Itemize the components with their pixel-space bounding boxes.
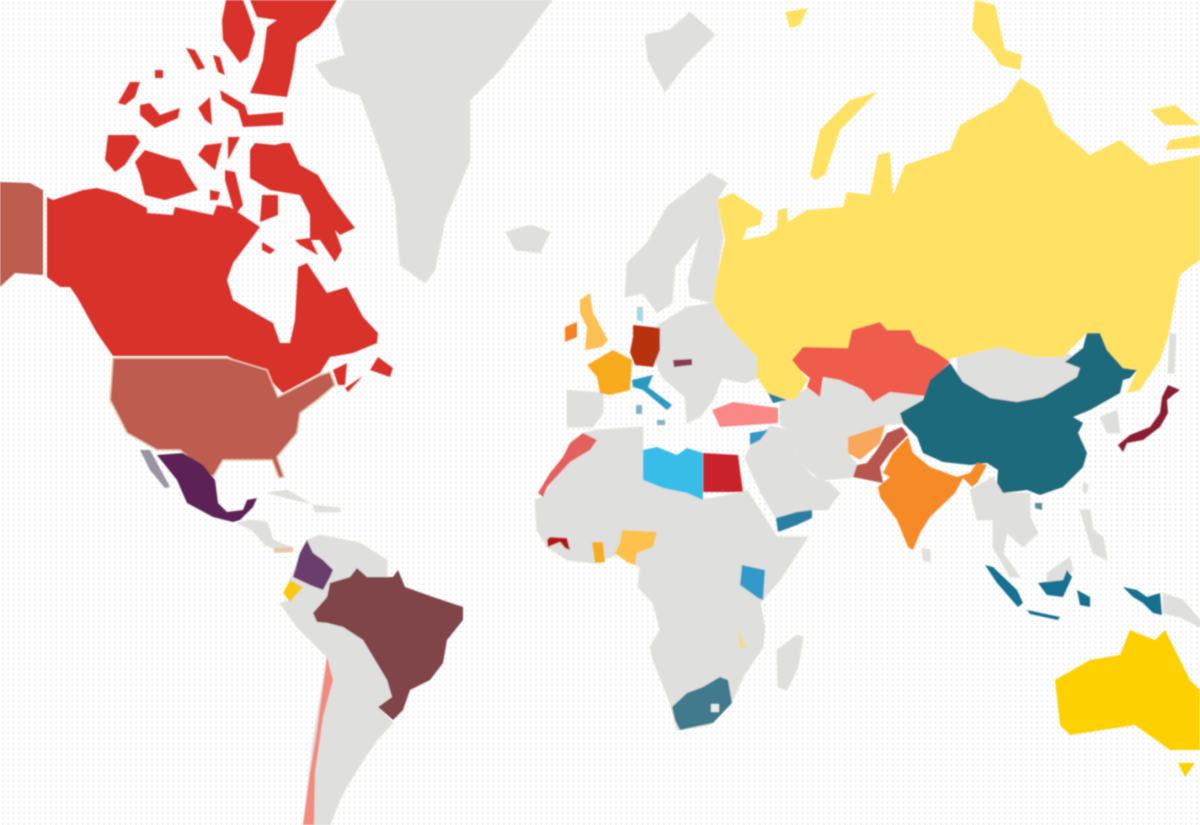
United States <box>110 358 335 478</box>
Indonesia <box>985 565 1162 620</box>
Baja California <box>140 450 170 488</box>
Italy <box>632 375 672 410</box>
Czech Republic <box>673 359 692 367</box>
Ecuador <box>283 580 303 602</box>
Alaska <box>0 182 43 287</box>
Colombia <box>293 540 333 590</box>
Chile <box>303 657 333 825</box>
India <box>878 437 987 550</box>
Russia <box>713 78 1200 400</box>
Newfoundland and Maritimes <box>333 357 393 392</box>
Japan <box>1118 385 1180 452</box>
Azerbaijan <box>768 393 787 403</box>
Panama <box>273 547 293 553</box>
Brazil <box>313 568 463 720</box>
Yemen <box>776 510 812 532</box>
Ghana <box>592 542 605 563</box>
Kenya <box>740 565 765 600</box>
Guinea <box>547 537 570 550</box>
Sardinia and Sicily <box>636 405 665 425</box>
Syria <box>750 430 768 445</box>
Libya <box>643 447 703 500</box>
Australia <box>1055 630 1200 750</box>
Turkey <box>712 402 778 427</box>
United Kingdom <box>580 293 608 350</box>
China <box>900 333 1137 495</box>
Ireland <box>565 322 577 342</box>
Arctic archipelago <box>105 0 355 262</box>
Morocco <box>538 433 597 497</box>
Mexico <box>157 453 257 522</box>
South Africa <box>672 677 732 730</box>
Canada <box>47 0 393 393</box>
Egypt <box>703 453 743 492</box>
Russian Arctic islands <box>785 0 1200 180</box>
Hainan <box>1035 503 1042 510</box>
Tasmania <box>1178 763 1195 777</box>
Afghanistan <box>848 425 885 460</box>
Kazakhstan <box>792 322 950 402</box>
Pakistan <box>853 427 908 483</box>
Nigeria <box>615 530 657 565</box>
Malawi <box>737 627 747 650</box>
Lesotho <box>711 704 719 712</box>
France <box>587 350 632 395</box>
Denmark <box>637 307 643 322</box>
Canadian mainland <box>47 188 378 393</box>
Germany <box>630 325 660 367</box>
